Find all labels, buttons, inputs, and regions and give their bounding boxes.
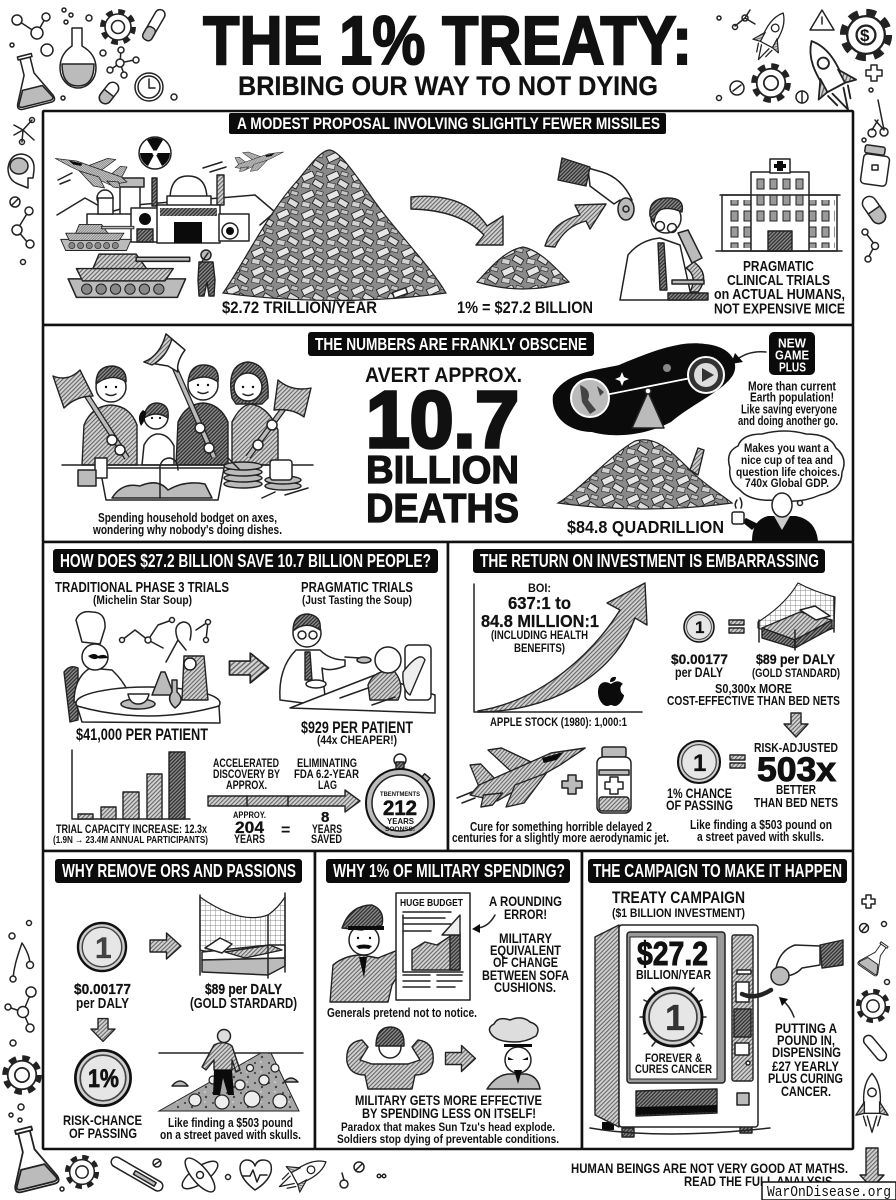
text: accelerated discovery: ACCELERATED (213, 758, 279, 770)
text: putting a pound in: CANCER. (781, 1084, 831, 1099)
illustration: military base (57, 175, 275, 243)
panel heading: A MODEST PROPOSAL INVOLVING SLIGHTLY FEWER MISSILES (237, 114, 660, 133)
icon: plus (562, 775, 582, 794)
panel heading (308, 332, 594, 356)
arrow: down (91, 1019, 115, 1041)
text: more than current population (738, 380, 838, 428)
icon: fighter jet right (203, 152, 284, 172)
text: risk adjusted 503x: THAN BED NETS (754, 795, 838, 810)
icon: coin one (684, 612, 714, 642)
text: pragmatic trials heading: (Just Tasting the Soup) (302, 593, 412, 607)
label: annual military spending: $2.72 TRILLION/YEAR (222, 299, 377, 317)
panel heading (326, 859, 570, 883)
text: sofa cushions: CUSHIONS. (494, 980, 556, 995)
text: trial capacity caption: TRIAL CAPACITY INCREASE: 12.3x (56, 822, 207, 836)
illustration: flexing soldier (347, 1027, 433, 1089)
panel heading: HOW DOES $27.2 BILLION SAVE 10.7 BILLION PEOPLE? (60, 551, 431, 571)
arrow: rounding error pointer (472, 915, 495, 933)
icon: bed with net (758, 583, 835, 650)
thought bubble: cup of tea: nice cup of tea and (741, 453, 833, 467)
text: a rounding error: A ROUNDING (489, 894, 562, 909)
text: cost per daly (74, 982, 297, 1012)
icon: stopwatch 212 years sooner: SOONSS! (385, 826, 415, 833)
text: years saved equation (233, 809, 342, 846)
text: pragmatic clinical trials (714, 258, 845, 318)
text: sofa cushions: MILITARY (499, 931, 552, 946)
text: cost per daly: (GOLD STARDARD) (190, 996, 297, 1012)
text: treaty campaign: TREATY CAMPAIGN (612, 888, 745, 907)
text: putting a pound in (768, 1021, 843, 1099)
subtitle: BRIBING OUR WAY TO NOT DYING (238, 71, 658, 101)
text: call to action: READ THE FULL ANALYSIS → (684, 1173, 847, 1189)
text: years saved equation: YEARS (234, 834, 265, 846)
text: sofa cushions (482, 931, 569, 995)
text: roi figures: 637:1 to (508, 593, 571, 613)
text: cost per patient pragmatic (301, 719, 413, 747)
bar chart: trial capacity (72, 750, 190, 819)
icon: large tank (68, 254, 190, 297)
text: chance of passing (666, 785, 733, 813)
text: military more effective (337, 1093, 559, 1146)
arrow: badge to galaxy (731, 352, 766, 364)
doodles: top right rockets and gears: $ (860, 26, 870, 45)
text: pragmatic clinical trials: on ACTUAL HUMANS, (714, 286, 845, 303)
text: putting a pound in: POUND IN, (777, 1033, 835, 1048)
icon: small tank (61, 224, 134, 251)
panel heading (473, 549, 825, 573)
text: risk adjusted 503x: 503x (757, 751, 836, 789)
text: years saved equation: APPROY. (233, 810, 266, 821)
illustration: small money pile (477, 247, 569, 289)
icon: coin one: 1 (95, 932, 112, 965)
illustration: family with axes at sink (53, 334, 311, 465)
arrow: timeline (208, 790, 360, 812)
text: roi figures: BOI: (528, 583, 551, 595)
text: trial capacity caption: (1.9N → 23.4M ANNUAL PARTICIPANTS) (53, 834, 208, 846)
panel: a modest proposal (43, 111, 853, 325)
icon: medicine bottle (597, 747, 631, 813)
caption: finding a pound (160, 1116, 301, 1142)
text: traditional trials heading (55, 580, 229, 607)
panel: the campaign (582, 851, 853, 1149)
text: risk chance: RISK-CHANCE (63, 1112, 142, 1128)
illustration: huge budget chart (396, 893, 470, 1000)
icon: hand inserting coin (742, 940, 843, 996)
text: more cost effective (667, 681, 840, 708)
text: putting a pound in: PUTTING A (775, 1021, 837, 1036)
text: roi figures (481, 583, 599, 655)
illustration: vending machine: BILLION/YEAR (636, 967, 711, 982)
icon: bed with net (200, 893, 285, 978)
caption: finding a pound: a street paved with skulls. (697, 830, 824, 844)
text: risk chance (63, 1112, 142, 1141)
illustration: scientist at microscope (620, 198, 708, 300)
arrow: down to one percent (411, 196, 503, 245)
arrow: right (150, 933, 181, 959)
icon: radiation symbol (139, 137, 171, 169)
panel: how does it save (43, 542, 448, 851)
doodles: left margin icons (8, 118, 34, 264)
text: cost per patient pragmatic: $929 PER PATIENT (301, 719, 413, 737)
icon: equals (730, 755, 745, 768)
icon: fighter jet left (55, 158, 127, 188)
illustration: huge budget chart: HUGE BUDGET (400, 897, 463, 909)
text: trial capacity caption (53, 822, 208, 846)
panel heading: WHY REMOVE ORS AND PASSIONS (62, 861, 296, 881)
arrow: traditional to pragmatic (230, 653, 268, 683)
panel: return on investment (448, 542, 853, 851)
arrow: to coin slot (779, 997, 794, 1017)
panel: the numbers (43, 325, 853, 542)
panel heading: THE NUMBERS ARE FRANKLY OBSCENE (315, 334, 587, 354)
illustration: sun tzu head exploding (487, 1018, 540, 1089)
text: accelerated discovery (213, 758, 280, 792)
text: years saved equation: = (281, 822, 290, 839)
text: accelerated discovery: DISCOVERY BY (213, 769, 280, 781)
text: years saved equation: YEARS (312, 824, 342, 836)
illustration: general pointing at chart (330, 905, 408, 1002)
text: risk chance: OF PASSING (69, 1125, 137, 1141)
caption: cure delayed (452, 820, 669, 845)
text: treaty campaign: ($1 BILLION INVESTMENT) (612, 906, 745, 920)
big number: deaths averted: BILLION (366, 449, 519, 492)
panel heading (53, 549, 438, 573)
doodles: top left science icons (6, 8, 177, 110)
text: roi figures: (INCLUDING HEALTH (491, 628, 588, 642)
illustration: hospital (716, 159, 842, 251)
text: cost per daly: $89 per DALY (756, 651, 836, 667)
text: cost per daly: $0.00177 (671, 651, 728, 667)
icon: stopwatch 212 years sooner: 212 (383, 797, 417, 820)
text: eliminating lag: ELIMINATING (297, 758, 357, 770)
icon: stopwatch 212 years sooner: YEARS (387, 816, 414, 826)
text: more cost effective: COST-EFFECTIVE THAN BED NETS (667, 693, 840, 708)
arrow: up to scientist (545, 204, 606, 247)
text: more cost effective: S0,300x MORE (715, 681, 792, 696)
icon: fighter jet (457, 748, 585, 807)
text: cost per daly: $89 per DALY (205, 982, 282, 998)
thought bubble: cup of tea: question life choices. (736, 465, 840, 479)
badge: new game plus: PLUS (779, 360, 806, 374)
text: roi figures: 84.8 MILLION:1 (481, 611, 599, 631)
big number: deaths averted: DEATHS (366, 485, 519, 531)
text: traditional trials heading: TRADITIONAL PHASE 3 TRIALS (55, 580, 229, 596)
thought bubble: cup of tea: 740x Global GDP. (745, 476, 829, 490)
caption: household budget: Spending household bodget on axes, (98, 510, 277, 525)
icon: large coin with rays (640, 988, 706, 1046)
text: pragmatic trials heading (301, 580, 413, 607)
illustration: doctor feeding patient (280, 614, 435, 713)
badge: new game plus: NEW (778, 336, 807, 350)
text: cost per daly (671, 651, 840, 680)
text: accelerated discovery: APPROX. (226, 780, 267, 792)
doodles: right margin icons (860, 100, 890, 262)
badge: new game plus (769, 332, 815, 375)
text: cost per daly: (GOLD STANDARD) (752, 666, 840, 680)
icon: apple logo (598, 677, 624, 706)
illustration: vending machine: CURES CANCER (635, 1062, 712, 1076)
illustration: quadrillion money pile (558, 440, 732, 509)
text: years saved equation: SAVED (311, 834, 342, 846)
badge: new game plus: GAME (775, 348, 809, 362)
panel: why remove ors and passions (43, 851, 315, 1149)
text: treaty campaign (612, 888, 745, 920)
text: chance of passing: OF PASSING (666, 797, 733, 813)
arrow: down to risk adjusted (784, 713, 808, 737)
icon: large coin: 1 (693, 750, 706, 777)
text: cost per daly: per DALY (675, 664, 723, 680)
text: military more effective: MILITARY GETS MORE EFFECTIVE (355, 1093, 542, 1108)
text: cost per daly: per DALY (76, 996, 129, 1012)
text: military more effective: BY SPENDING LESS ON ITSELF! (362, 1106, 536, 1121)
text: putting a pound in: DISPENSING (772, 1045, 841, 1060)
illustration: man with teacup (732, 493, 818, 541)
text: eliminating lag (294, 758, 360, 792)
caption: finding a pound: Like finding a $503 pound on (690, 818, 832, 832)
caption: generals pretend: Generals pretend not to notice. (327, 1006, 477, 1020)
icon: coin one (78, 923, 126, 971)
text: pragmatic trials heading: PRAGMATIC TRIALS (301, 580, 413, 596)
big number: deaths averted (365, 364, 522, 531)
icon: one percent coin: 1% (88, 1065, 119, 1093)
text: more than current population: Like saving everyone (741, 402, 837, 416)
illustration: sink full of dishes (62, 458, 313, 500)
title: THE 1% TREATY: (203, 2, 692, 79)
text: eliminating lag: LAG (318, 780, 337, 792)
caption: household budget: wondering why nobody's doing dishes. (92, 522, 282, 537)
text: chance of passing: 1% CHANCE (667, 785, 732, 801)
text: more than current population: and doing another go. (738, 414, 838, 428)
text: sofa cushions: OF CHANGE (493, 955, 558, 970)
illustration: vending machine: $27.2 (637, 935, 708, 972)
text: call to action (571, 1160, 848, 1189)
doodles: bottom strip icons (60, 1149, 386, 1199)
text: military more effective: Paradox that makes Sun Tzu's head explode. (341, 1120, 555, 1134)
text: pragmatic clinical trials: NOT EXPENSIVE MICE (714, 300, 845, 318)
text: cost per patient pragmatic: (44x CHEAPER!) (317, 733, 397, 747)
text: cost per daly: $0.00177 (74, 982, 131, 998)
label: total value: $84.8 QUADRILLION (567, 517, 724, 537)
icon: large coin (678, 741, 720, 783)
text: sofa cushions: EQUIVALENT (490, 943, 562, 958)
text: putting a pound in: £27 YEARLY (772, 1059, 839, 1074)
text: apple stock: APPLE STOCK (1980): 1,000:1 (490, 717, 628, 729)
text: putting a pound in: PLUS CURING (768, 1071, 843, 1086)
text: years saved equation: 204 (235, 819, 265, 837)
illustration: huge money pile (223, 150, 446, 300)
text: military more effective: Soldiers stop dying of preventable conditions. (337, 1132, 559, 1146)
text: risk adjusted 503x (754, 740, 838, 810)
illustration: person on street of skulls (159, 1030, 303, 1111)
doodles: lower left margin icons (2, 920, 60, 1193)
arrow: soldier to sun tzu (446, 1046, 476, 1072)
text: a rounding error: ERROR! (504, 907, 547, 922)
text: a rounding error (489, 894, 562, 922)
panel heading (55, 859, 302, 883)
text: pragmatic clinical trials: PRAGMATIC (743, 258, 814, 275)
caption: finding a pound: on a street paved with skulls. (160, 1128, 301, 1142)
text: more than current population: More than current (748, 380, 837, 394)
icon: one percent coin (75, 1050, 131, 1106)
thought bubble: cup of tea (729, 431, 844, 506)
text: sofa cushions: BETWEEN SOFA (482, 968, 569, 983)
doodles: lower right margin icons (856, 895, 894, 1132)
doodles: top right rockets and gears (716, 6, 887, 120)
icon: stopwatch 212 years sooner: TBENTMENTS (380, 791, 421, 798)
icon: stopwatch 212 years sooner (366, 754, 434, 837)
caption: cure delayed: centuries for a slightly more aerodynamic jet. (452, 831, 669, 845)
big number: deaths averted: 10.7 (366, 375, 519, 464)
illustration: earth on scale in space (553, 343, 735, 435)
panel: why one percent of military spending (315, 851, 582, 1149)
label: one percent value: 1% = $27.2 BILLION (457, 299, 593, 317)
text: pragmatic clinical trials: CLINICAL TRIALS (727, 272, 830, 289)
thought bubble: cup of tea: Makes you want a (744, 441, 829, 455)
illustration: vending machine: FOREVER & (645, 1051, 702, 1065)
arrow: down to website (860, 1148, 884, 1188)
text: risk adjusted 503x: BETTER (776, 782, 816, 797)
text: risk adjusted 503x: RISK-ADJUSTED (754, 740, 838, 755)
caption: finding a pound (690, 818, 832, 844)
text: more than current population: Earth population! (750, 390, 834, 404)
icon: coin one: 1 (695, 618, 704, 637)
icon: saluting soldier (198, 250, 215, 296)
illustration: chef with lab equipment (64, 612, 220, 723)
panel heading: WHY 1% OF MILITARY SPENDING? (333, 861, 565, 881)
text: traditional trials heading: (Michelin Star Soup) (93, 593, 192, 607)
big number: deaths averted: AVERT APPROX. (365, 364, 522, 387)
text: eliminating lag: FDA 6.2-YEAR (294, 769, 360, 781)
icon: large coin with rays: 1 (665, 997, 685, 1038)
caption: household budget (92, 510, 282, 537)
illustration: vending machine (590, 925, 770, 1137)
icon: equals (729, 620, 744, 633)
text: cost per patient traditional: $41,000 PER PATIENT (76, 726, 208, 744)
text: years saved equation: 8 (321, 809, 329, 826)
line chart: roi curve with axes (474, 583, 647, 712)
caption: cure delayed: Cure for something horrible delayed 2 (470, 820, 652, 834)
text: roi figures: BENEFITS) (514, 641, 565, 655)
icon: hand dropping coin (558, 158, 634, 220)
caption: finding a pound: Like finding a $503 pound (168, 1116, 293, 1130)
